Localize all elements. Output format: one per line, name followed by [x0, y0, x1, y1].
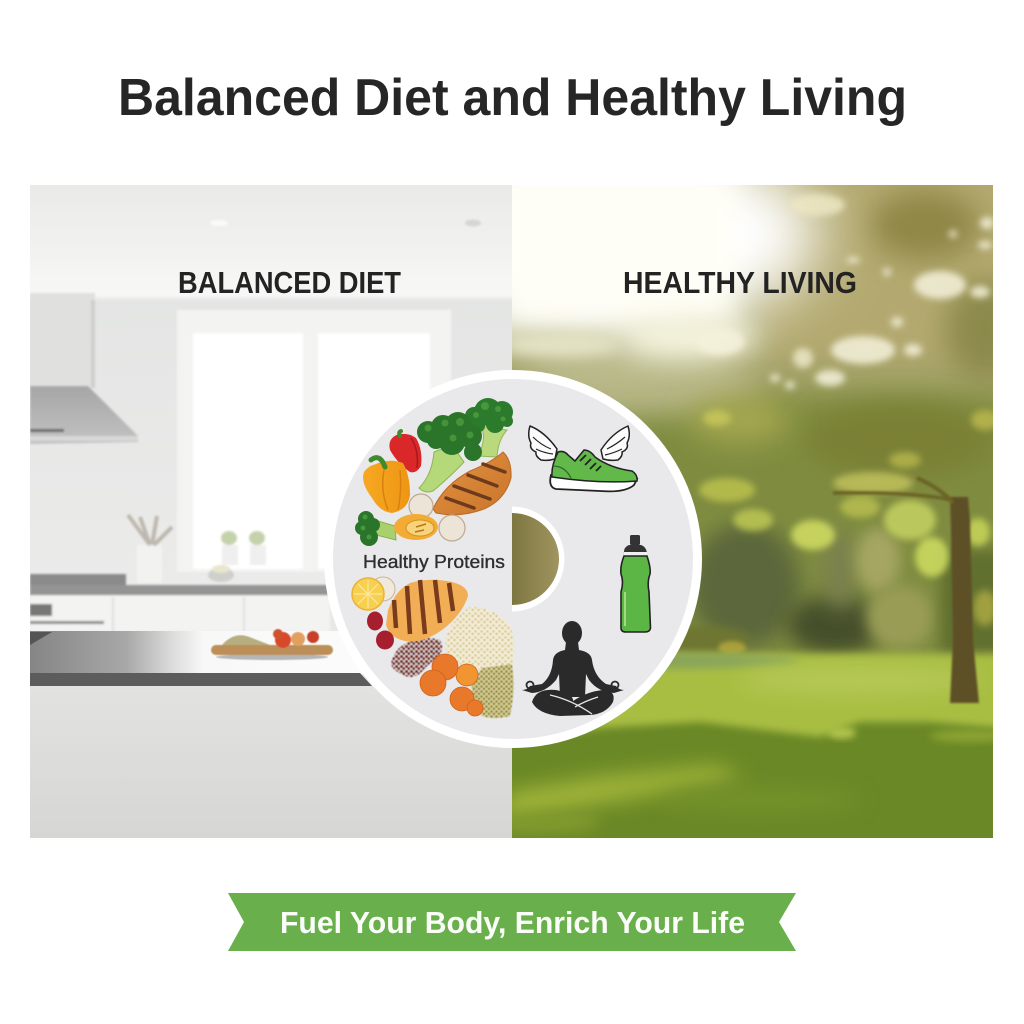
tagline ribbon: Fuel Your Body, Enrich Your Life: [280, 905, 745, 940]
icon: meditating person: [522, 621, 624, 716]
panel: healthy living park scene: [512, 185, 993, 838]
grass lawn: [512, 648, 993, 838]
window sill plants and bowl: [208, 531, 266, 582]
food: cranberries: [367, 612, 394, 650]
range hood: [30, 293, 138, 444]
centre hole: [512, 506, 564, 612]
food: citrus and mushroom: [352, 577, 395, 610]
icon: water bottle: [621, 535, 650, 632]
distant dark trees: [650, 523, 1010, 655]
tree trunk and branches: [833, 478, 979, 703]
disc ring and face: [324, 370, 702, 748]
panel: balanced diet kitchen scene: [30, 185, 512, 838]
ceiling: [30, 242, 512, 298]
utensil crock: [126, 514, 174, 546]
food: grilled chicken top: [433, 452, 511, 515]
food: yellow pepper: [363, 458, 410, 513]
window: [177, 310, 451, 572]
disc label: healthy proteins: Healthy Proteins: [363, 552, 505, 572]
upper: [552, 450, 637, 482]
island worktop: [30, 631, 512, 838]
back counter and stove: [30, 574, 330, 633]
food: broccoli front: [417, 412, 482, 492]
food: carrot slices: [420, 654, 483, 716]
tree canopy: [532, 185, 993, 656]
dappled sky gaps in the canopy: [696, 194, 994, 389]
kitchen wall: [20, 296, 520, 589]
food: mushrooms: [409, 494, 465, 541]
title: Balanced Diet and Healthy Living: [118, 69, 907, 127]
ceiling lights: [210, 220, 481, 226]
heading: healthy living: HEALTHY LIVING: [623, 265, 857, 300]
food: grilled chicken bottom: [386, 580, 468, 642]
food: grains: [391, 607, 514, 718]
heading: balanced diet: BALANCED DIET: [178, 265, 401, 300]
central disc: [324, 370, 702, 748]
food: red pepper: [389, 431, 421, 472]
tagline ribbon: [228, 893, 796, 951]
wings: [529, 426, 629, 460]
icon: winged running shoe: [529, 426, 637, 491]
food board on island: [211, 629, 333, 660]
sunlit sky glow: [512, 185, 859, 382]
food: orange ring slice: [394, 514, 438, 540]
food: small broccoli: [355, 511, 396, 546]
sole: [550, 475, 637, 491]
food: broccoli back: [465, 398, 513, 457]
bright lit foliage: [699, 410, 999, 577]
